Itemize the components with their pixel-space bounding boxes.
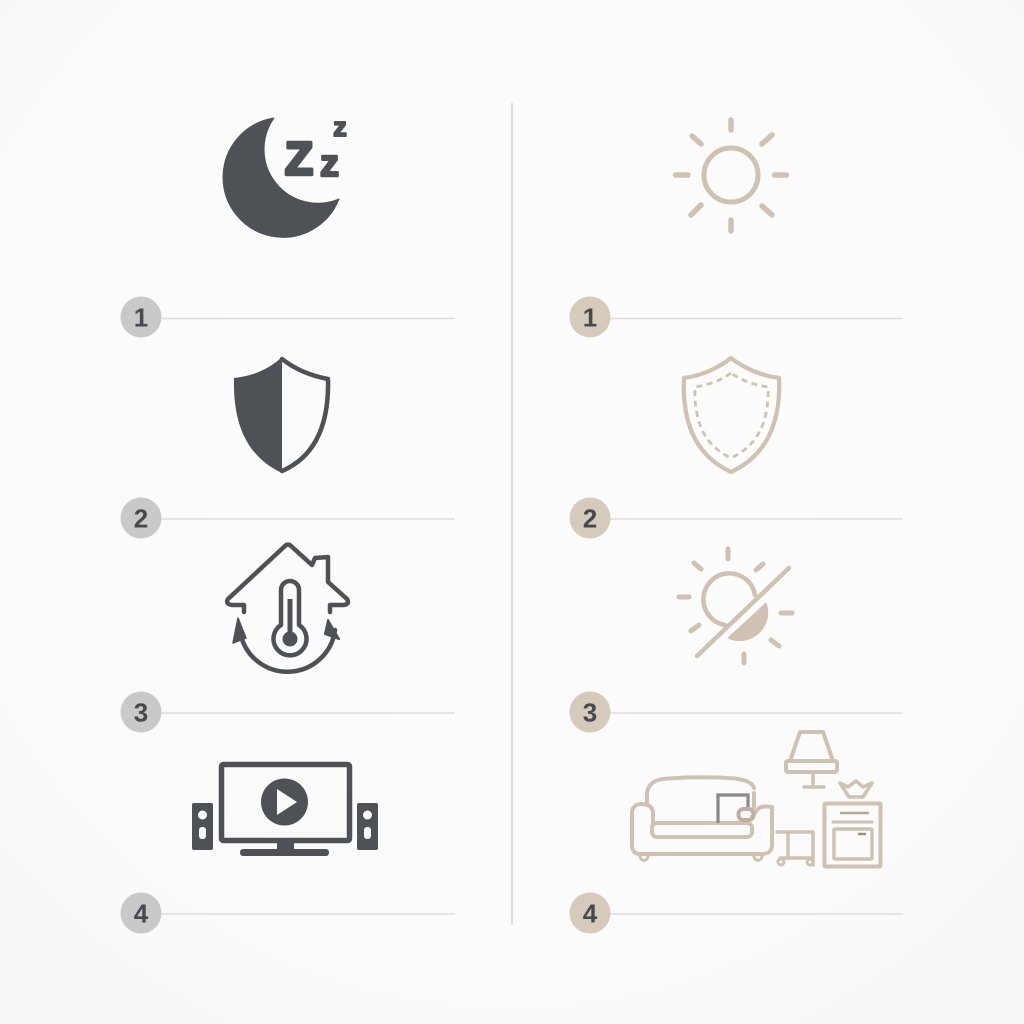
icon: crescent moon with Zzz: z xyxy=(320,143,339,185)
icon: crescent moon with Zzz: Z xyxy=(285,132,313,184)
number badge 4 right: 4 xyxy=(583,898,598,928)
number badge 2 left xyxy=(120,498,162,538)
number badge 3 left xyxy=(120,692,162,732)
number badge 3 left: 3 xyxy=(134,698,148,728)
icon: house with thermometer and circular arrows xyxy=(227,544,348,672)
side table xyxy=(777,832,813,865)
icon: sun with diagonal slash xyxy=(679,549,792,663)
number badge 4 left xyxy=(120,892,162,934)
number badge 4 left: 4 xyxy=(134,898,149,928)
icon: television with play button and speakers xyxy=(192,764,378,856)
number badge 2 left: 2 xyxy=(134,504,148,534)
sofa xyxy=(632,777,772,860)
icon: half-filled shield xyxy=(234,357,328,473)
number badge 2 right: 2 xyxy=(583,504,597,534)
number badge 4 right xyxy=(570,892,610,934)
panel: right column, tan icons xyxy=(570,120,903,934)
number badge 1 left xyxy=(120,296,162,338)
number badge 3 right: 3 xyxy=(583,698,597,728)
table lamp xyxy=(786,732,837,787)
icon: living room furniture xyxy=(632,732,880,866)
number badge 1 left: 1 xyxy=(134,302,148,332)
icon: outlined sun xyxy=(676,120,786,231)
crown ornament xyxy=(840,781,872,797)
panel: left column, dark icons xyxy=(120,112,455,934)
number badge 1 right: 1 xyxy=(583,302,597,332)
number badge 1 right xyxy=(570,296,610,338)
icon: crescent moon with Zzz xyxy=(223,112,347,237)
icon: outlined shield with dashed inner line xyxy=(684,358,779,472)
nightstand xyxy=(824,804,880,866)
number badge 3 right xyxy=(570,692,610,732)
number badge 2 right xyxy=(570,498,610,538)
icon: crescent moon with Zzz: z xyxy=(333,112,347,142)
